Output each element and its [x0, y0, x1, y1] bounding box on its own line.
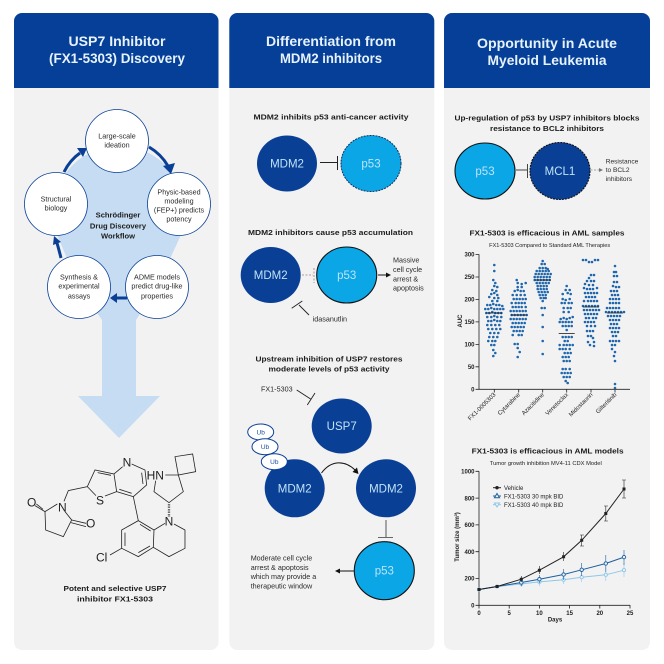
cycle arrow: structural to ideation: [64, 148, 87, 172]
outcome: moderate arrest: Moderate cell cycle: [251, 554, 312, 562]
header: discovery: (FX1-5303) Discovery: [49, 50, 185, 66]
molecule: FX1-5303 structure: O: [27, 495, 36, 509]
workflow node: physics modeling: modeling: [164, 197, 194, 206]
x axis labels: [467, 392, 619, 422]
node: USP7: USP7: [327, 421, 357, 433]
node: p53: p53: [337, 270, 356, 282]
workflow node: large-scale ideation: ideation: [104, 140, 130, 149]
arrow to moderate arrest: [335, 568, 354, 574]
panel: differentiation from MDM2 inhibitors: [229, 13, 434, 650]
dashed arrow to resistance: [590, 168, 603, 172]
workflow node: synthesis: assays: [68, 291, 91, 300]
workflow node: physics modeling: Physic-based: [157, 187, 201, 196]
inhibition mark: [320, 156, 338, 170]
axis titles: Days: [548, 618, 563, 624]
series: 40 mpk: [477, 563, 626, 591]
molecule: FX1-5303 structure: N: [165, 514, 173, 528]
workflow label: [90, 211, 147, 241]
node: MDM2 ubiquitinated: MDM2: [278, 483, 312, 495]
workflow node: physics modeling: [148, 172, 210, 236]
molecule: FX1-5303 structure: [27, 454, 196, 564]
label: FX1-5303: FX1-5303: [261, 384, 293, 394]
series: Midostaurin: [583, 260, 599, 346]
heading: up-regulation of p53: Up-regulation of p53 by USP7 inhibitors blocks: [454, 114, 640, 122]
y axis labels: 100: [464, 342, 475, 348]
workflow node: structural biology: Structural: [41, 195, 72, 204]
header: opportunity: Opportunity in Acute: [477, 35, 617, 51]
label: resistance to BCL2 inhibitors: [606, 158, 639, 183]
label: idasanutlin: idasanutlin: [313, 314, 347, 324]
y axis labels: 800: [464, 496, 475, 502]
molecule: FX1-5303 structure: O: [86, 517, 95, 531]
x axis labels: Azacitidine: [521, 392, 546, 417]
outcome: moderate arrest: which may provide a: [250, 572, 316, 581]
heading: MDM2 inhibitors cause accumulation: MDM2 inhibitors cause p53 accumulation: [248, 228, 413, 237]
ubiquitin tags: [248, 424, 287, 470]
node: MDM2: [241, 247, 301, 303]
node: p53: [455, 143, 515, 199]
series: FX1-0005303: [485, 265, 503, 356]
workflow node: synthesis: Synthesis &: [60, 272, 98, 281]
node: p53 dashed: p53: [361, 158, 381, 170]
pale blue funnel arrow: [53, 146, 185, 438]
x axis labels: 25: [627, 611, 634, 617]
molecule: FX1-5303 structure: N: [58, 500, 67, 514]
x axis labels: [477, 611, 634, 617]
x axis labels: 5: [508, 611, 512, 617]
series: 30 mpk: [479, 550, 626, 590]
curved arrow between MDM2 states: [322, 463, 358, 474]
series: Azacitidine: [535, 261, 551, 354]
node: MDM2 ubiquitinated: [265, 459, 325, 517]
y axis labels: 1000: [461, 470, 475, 476]
outcome: moderate arrest: therapeutic window: [251, 582, 313, 590]
workflow node: synthesis: experimental: [58, 282, 100, 291]
axis titles: Tumor size (mm³): [454, 512, 461, 562]
ubiquitin tags: Ub: [261, 444, 270, 451]
subheading: tumor growth inhibition: Tumor growth inhibition MV4-11 CDX Model: [490, 461, 602, 467]
legend: FX1-5303 30 mpk BID: [504, 494, 564, 500]
legend: [493, 486, 564, 509]
heading: up-regulation of p53: [454, 114, 640, 133]
y axis labels: 0: [471, 604, 475, 610]
node: p53 moderate: p53: [375, 566, 394, 578]
y axis labels: 600: [464, 523, 475, 529]
outcome: massive arrest: Massive: [393, 256, 419, 264]
header: differentiation: MDM2 inhibitors: [280, 50, 382, 66]
x axis labels: 20: [596, 611, 604, 617]
workflow label: Schrödinger: [96, 211, 140, 220]
header: discovery: USP7 Inhibitor: [68, 33, 166, 49]
inhibition mark to p53: [378, 520, 393, 538]
caption: potent and selective inhibitor: Potent and selective USP7: [64, 584, 166, 593]
node: MDM2: MDM2: [270, 158, 304, 170]
heading: efficacious in AML samples: FX1-5303 is efficacious in AML samples: [470, 229, 624, 238]
y axis labels: 50: [468, 365, 475, 371]
FX1-5303 inhibition mark: [297, 390, 315, 405]
cycle arrow: ideation to modeling: [149, 147, 175, 174]
y axis and ticks: [476, 254, 630, 392]
chart: AUC beeswarm: [458, 252, 630, 422]
series: vehicle: [479, 480, 626, 590]
outcome: massive arrest: [393, 256, 424, 292]
legend: Vehicle: [504, 486, 524, 492]
series: Venetoclax: [559, 286, 575, 383]
label: resistance to BCL2 inhibitors: Resistance: [606, 158, 639, 165]
header: differentiation: [229, 13, 434, 88]
ubiquitin tags: Ub: [257, 430, 265, 436]
axis titles: [454, 512, 563, 624]
workflow node: structural biology: [24, 172, 88, 236]
x axis labels: 10: [536, 611, 543, 617]
workflow label: Workflow: [101, 232, 135, 241]
legend: FX1-5303 40 mpk BID: [504, 503, 564, 509]
x axis labels: Cytarabine: [497, 392, 522, 417]
heading: MDM2 inhibits p53: MDM2 inhibits p53 anti-cancer activity: [254, 112, 409, 122]
heading: upstream inhibition of USP7: [256, 354, 402, 374]
node: p53: p53: [475, 166, 495, 178]
subheading: compared to standard therapies: FX1-5303 Compared to Standard AML Therapies: [489, 243, 611, 249]
node: MCL1 dashed: [530, 142, 590, 200]
workflow node: large-scale ideation: [86, 110, 148, 172]
y axis labels: 150: [464, 320, 475, 326]
workflow node: ADME: ADME models: [134, 272, 180, 281]
arrow to cell cycle arrest: [378, 272, 391, 278]
header: opportunity: Myeloid Leukemia: [488, 52, 607, 68]
label: resistance to BCL2 inhibitors: inhibitors: [606, 176, 633, 183]
x axis labels: 15: [566, 611, 574, 617]
workflow node: ADME: properties: [141, 291, 173, 300]
workflow node: synthesis: [48, 256, 110, 318]
molecule: FX1-5303 structure: Cl: [96, 550, 107, 564]
molecule: FX1-5303 structure: N: [123, 455, 131, 469]
dashed broken inhibition: [302, 268, 314, 283]
x axis labels: 0: [477, 611, 481, 617]
y axis labels: 400: [464, 550, 475, 556]
node: MDM2 free: [356, 459, 416, 517]
outcome: moderate arrest: [250, 554, 316, 590]
x axis labels: FX1-0005303: [467, 392, 498, 422]
x axis labels: Venetoclax: [545, 392, 570, 417]
node: MDM2: [257, 136, 317, 192]
caption: potent and selective inhibitor: inhibitor FX1-5303: [77, 594, 153, 603]
caption: potent and selective inhibitor: [64, 584, 166, 603]
workflow node: physics modeling: potency: [166, 215, 192, 224]
inhibition mark: [516, 164, 528, 178]
node: MCL1 dashed: MCL1: [545, 166, 575, 178]
y axis labels: [461, 470, 475, 610]
y axis labels: 200: [464, 577, 475, 583]
idasanutlin inhibitor mark: [292, 301, 309, 315]
series: Gilteritinib: [606, 266, 624, 388]
axes: [476, 471, 630, 608]
x axis labels: Gilteritinib: [595, 392, 619, 415]
outcome: massive arrest: apoptosis: [393, 284, 424, 292]
outcome: massive arrest: cell cycle: [393, 265, 422, 274]
chart: tumor growth lines: [454, 470, 634, 624]
workflow node: structural biology: biology: [45, 204, 68, 213]
heading: upstream inhibition of USP7: Upstream inhibition of USP7 restores: [256, 354, 402, 364]
node: USP7: [312, 398, 372, 454]
y axis labels: 200: [464, 298, 475, 304]
header: discovery: [14, 13, 218, 88]
node: p53 moderate: [354, 542, 414, 600]
node: MDM2: MDM2: [254, 270, 288, 282]
y axis labels: 300: [464, 252, 475, 258]
y axis title: AUC: [458, 314, 464, 328]
label: resistance to BCL2 inhibitors: to BCL2: [606, 167, 630, 174]
ubiquitin tags: Ub: [270, 459, 279, 466]
node: MDM2 free: MDM2: [369, 483, 403, 495]
node: p53 dashed: [341, 136, 401, 192]
series: Cytarabine: [511, 280, 527, 357]
node: p53: [317, 247, 377, 303]
cycle arrow: synthesis to structural: [53, 236, 61, 258]
y axis labels: 0: [471, 387, 475, 393]
heading: up-regulation of p53: resistance to BCL2 inhibitors: [490, 124, 604, 133]
heading: efficacious in AML models: FX1-5303 is efficacious in AML models: [472, 447, 624, 456]
workflow node: ADME: [126, 256, 188, 318]
outcome: massive arrest: arrest &: [393, 274, 418, 284]
workflow node: ADME: predict drug-like: [131, 282, 183, 291]
molecule: FX1-5303 structure: S: [96, 493, 104, 507]
cycle arrow: ADME to synthesis: [110, 293, 127, 303]
outcome: moderate arrest: arrest & apoptosis: [251, 563, 309, 572]
workflow label: Drug Discovery: [90, 221, 147, 230]
header: opportunity: [444, 13, 650, 88]
heading: upstream inhibition of USP7: moderate levels of p53 activity: [268, 364, 390, 374]
header: differentiation: Differentiation from: [266, 33, 396, 49]
panel: USP7 inhibitor discovery: [14, 13, 218, 650]
panel: opportunity in AML: [444, 13, 650, 650]
workflow node: large-scale ideation: Large-scale: [98, 131, 136, 140]
molecule: FX1-5303 structure: HN: [147, 468, 164, 482]
x axis labels: Midostaurin: [568, 392, 594, 418]
y axis labels: 250: [464, 275, 475, 281]
workflow node: physics modeling: (FEP+) predicts: [154, 206, 204, 215]
y axis labels: [464, 252, 475, 393]
